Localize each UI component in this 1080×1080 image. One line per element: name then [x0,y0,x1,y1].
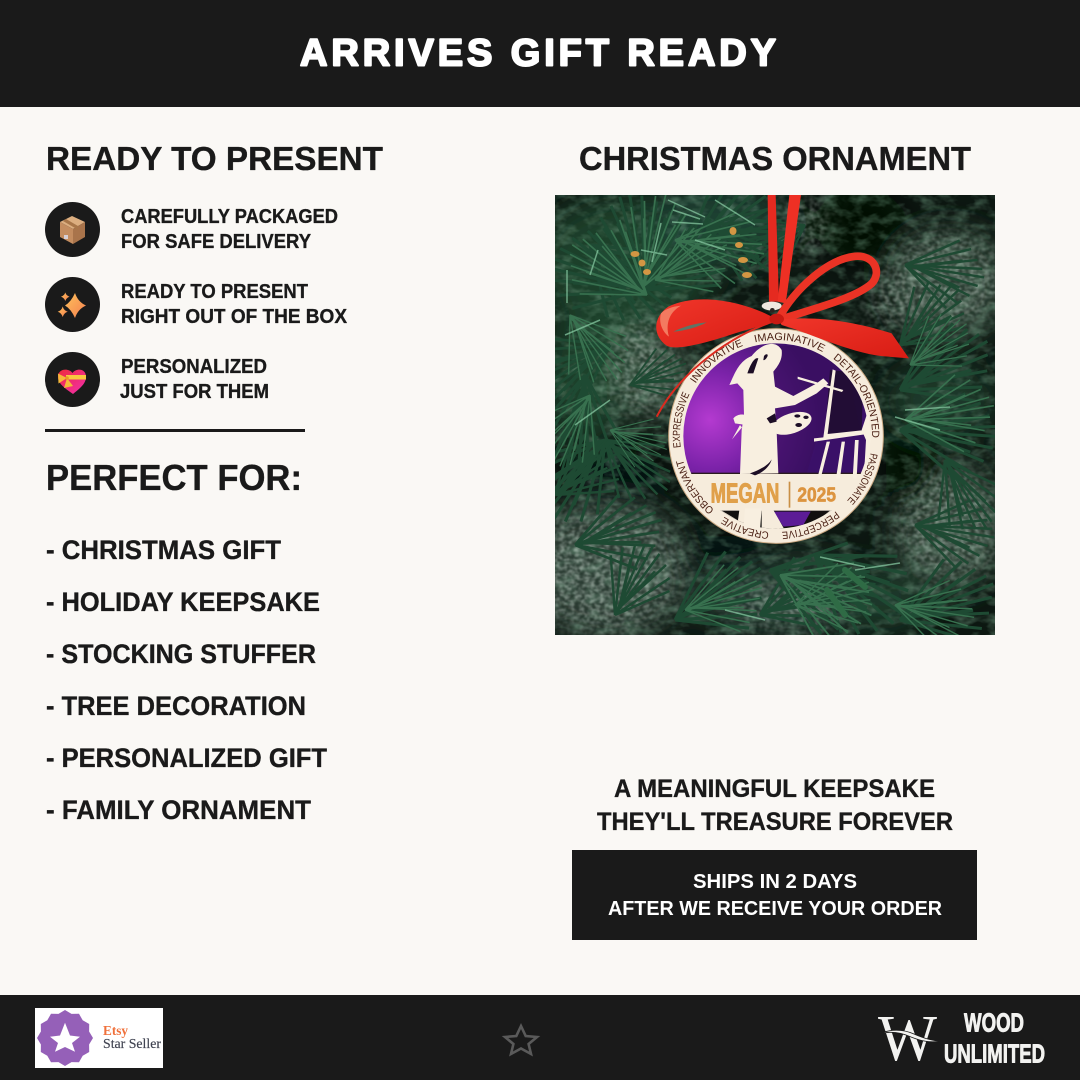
ornament: curved trait words: OBSERVANT [676,461,713,514]
ribbon: bow [656,256,909,417]
heading: ready to present: READY TO PRESENT [46,140,383,177]
feature: carefully packaged [45,202,338,257]
icon: package box [45,202,100,257]
callout: shipping: SHIPS IN 2 DAYS [693,870,857,893]
text: carefully packaged: FOR SAFE DELIVERY [121,231,312,253]
list: occasions: - STOCKING STUFFER [46,639,316,669]
icon: sparkles [45,277,100,332]
ornament [669,329,883,543]
pine needles: mid layer [555,195,994,635]
feature: ready to present [45,277,348,332]
light bulb: green wire [827,570,865,615]
header band [0,0,1080,107]
text: carefully packaged: CAREFULLY PACKAGED [121,206,338,228]
badge: etsy star seller [35,1008,163,1068]
ornament: curved trait words: EXPRESSIVE [672,392,690,448]
ribbon: hanging strands [768,195,801,303]
ornament: curved trait words: INNOVATIVE [690,339,743,383]
ornament: name and year: 2025 [797,484,836,507]
ornament: curved trait words: PERCEPTIVE [782,512,840,540]
badge: etsy star seller: Etsy [103,1024,128,1039]
callout: shipping [572,850,977,940]
tagline: A MEANINGFUL KEEPSAKE [614,775,935,803]
ornament: purple inner panel [683,343,866,529]
logo: wood unlimited: WOOD [964,1010,1024,1038]
list: occasions: - HOLIDAY KEEPSAKE [46,587,320,617]
list: occasions: - FAMILY ORNAMENT [46,795,311,825]
logo: wood unlimited: W [878,1002,938,1075]
ornament: curved trait words [672,332,880,540]
text: ready to present [121,281,348,328]
list: occasions: - CHRISTMAS GIFT [46,535,281,565]
tagline [597,775,953,836]
callout: shipping: AFTER WE RECEIVE YOUR ORDER [608,897,942,920]
icon: gift heart [45,352,100,407]
pine needles: dark layer [555,195,995,635]
badge: etsy star seller: Star Seller [103,1036,162,1051]
title: ARRIVES GIFT READY [300,32,776,74]
text: personalized: JUST FOR THEM [120,381,269,403]
ornament: name and year: MEGAN [711,478,779,509]
text: personalized [120,356,269,403]
footer band [0,995,1080,1080]
ornament: curved trait words: IMAGINATIVE [754,332,826,352]
icon: outline star [505,1026,537,1054]
ornament: silhouette details [747,354,809,475]
heading: perfect for: PERFECT FOR: [46,457,302,498]
photo: ornament on pine tree [555,195,995,635]
ornament: curved trait words: CREATIVE [720,516,768,539]
list: occasions: - PERSONALIZED GIFT [46,743,327,773]
feature: personalized [45,352,269,407]
pine buds: orange [630,227,752,278]
text: ready to present: RIGHT OUT OF THE BOX [121,306,348,328]
frost on branches [527,195,1003,632]
ornament: painter silhouette [729,344,871,535]
text: carefully packaged [121,206,338,253]
logo: wood unlimited [878,1002,1045,1075]
tagline: THEY'LL TREASURE FOREVER [597,808,953,836]
list: occasions [46,535,327,825]
ornament: curved trait words: DETAIL-ORIENTED [834,353,880,438]
text: personalized: PERSONALIZED [121,356,267,378]
list: occasions: - TREE DECORATION [46,691,306,721]
heading: christmas ornament: CHRISTMAS ORNAMENT [579,140,971,177]
pine needles: bright highlights [565,200,950,620]
ornament: curved trait words: PASSIONATE [847,454,878,505]
text: ready to present: READY TO PRESENT [121,281,308,303]
